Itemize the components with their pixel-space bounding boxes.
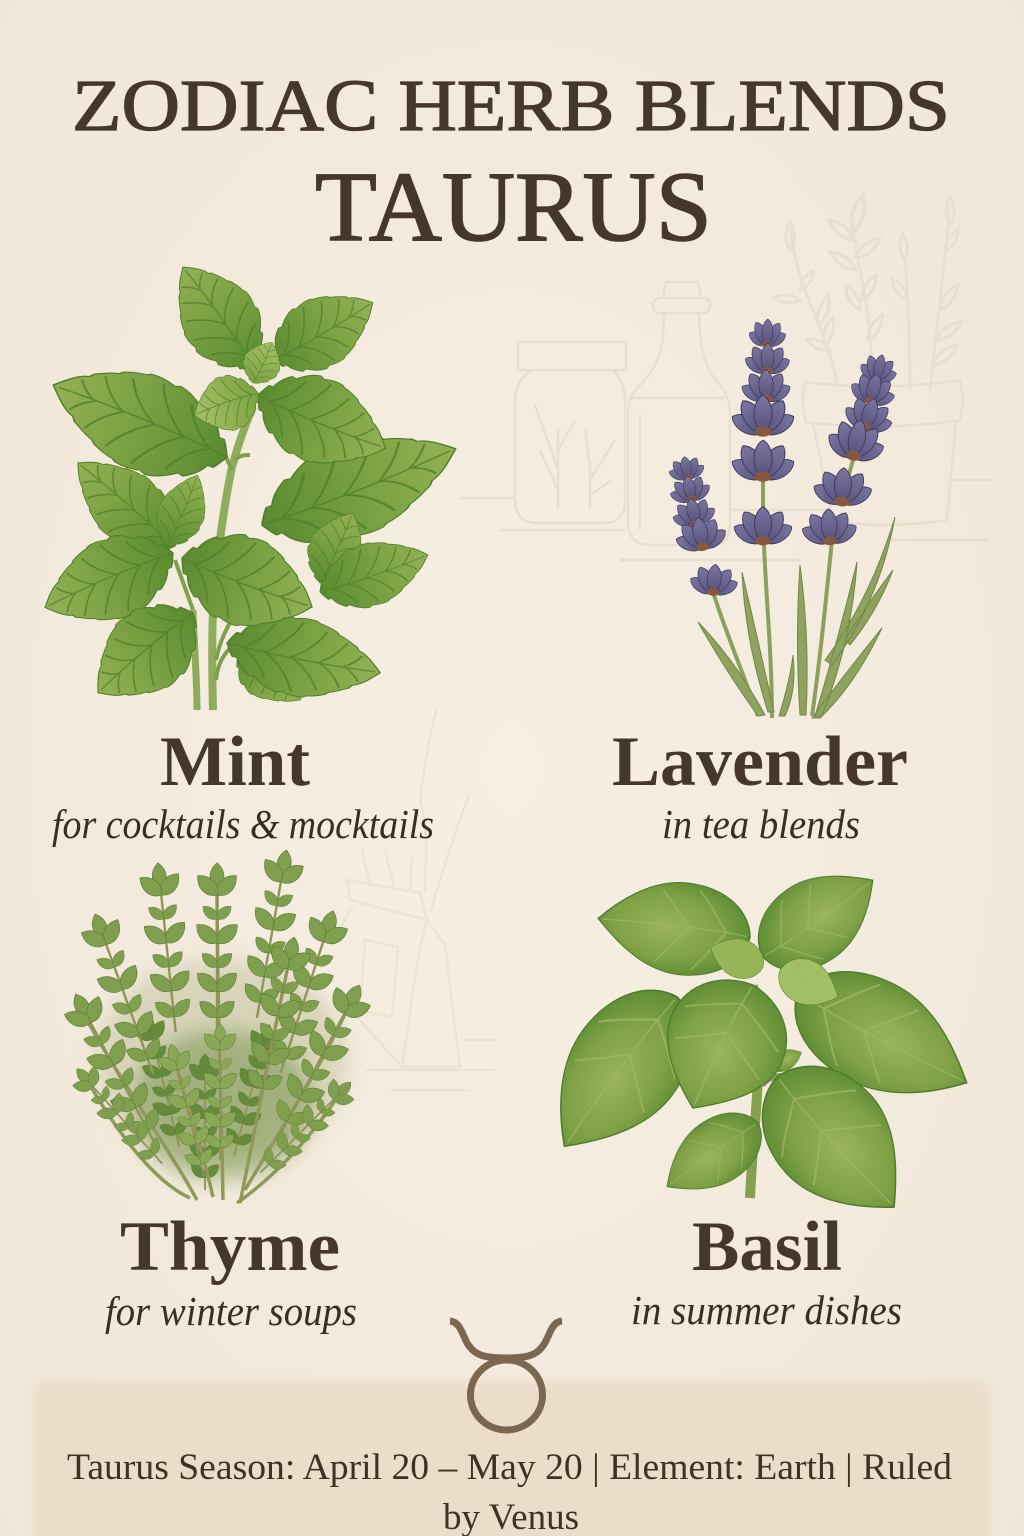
illustration: thyme plant [53,846,382,1203]
caption: Lavender: in tea blends [662,801,860,847]
footer band [33,1381,990,1536]
illustration: mint plant [29,245,473,724]
caption: Thyme: for winter soups [105,1288,357,1334]
background sketch: potted herbs [460,193,995,560]
subtitle: Taurus: TAURUS [315,151,712,262]
background sketch: herb sack [340,710,495,1090]
title: ZODIAC HERB BLENDS [72,65,950,146]
label: Mint: Mint [160,723,310,801]
label: Lavender: Lavender [612,723,908,801]
background sketch: bottle [628,282,730,545]
illustration: lavender plant [665,318,902,718]
caption: Basil: in summer dishes [631,1287,902,1333]
background sketch: jar [515,342,626,523]
label: Thyme: Thyme [120,1208,340,1286]
caption: Mint: for cocktails & mocktails [52,801,434,847]
icon: Taurus symbol [450,1321,562,1430]
label: Basil: Basil [692,1208,842,1286]
footer text [67,1447,953,1536]
footer text: Taurus Season: April 20 – May 20 | Element: Earth | Ruled [67,1447,953,1488]
illustration: basil plant [520,846,991,1246]
